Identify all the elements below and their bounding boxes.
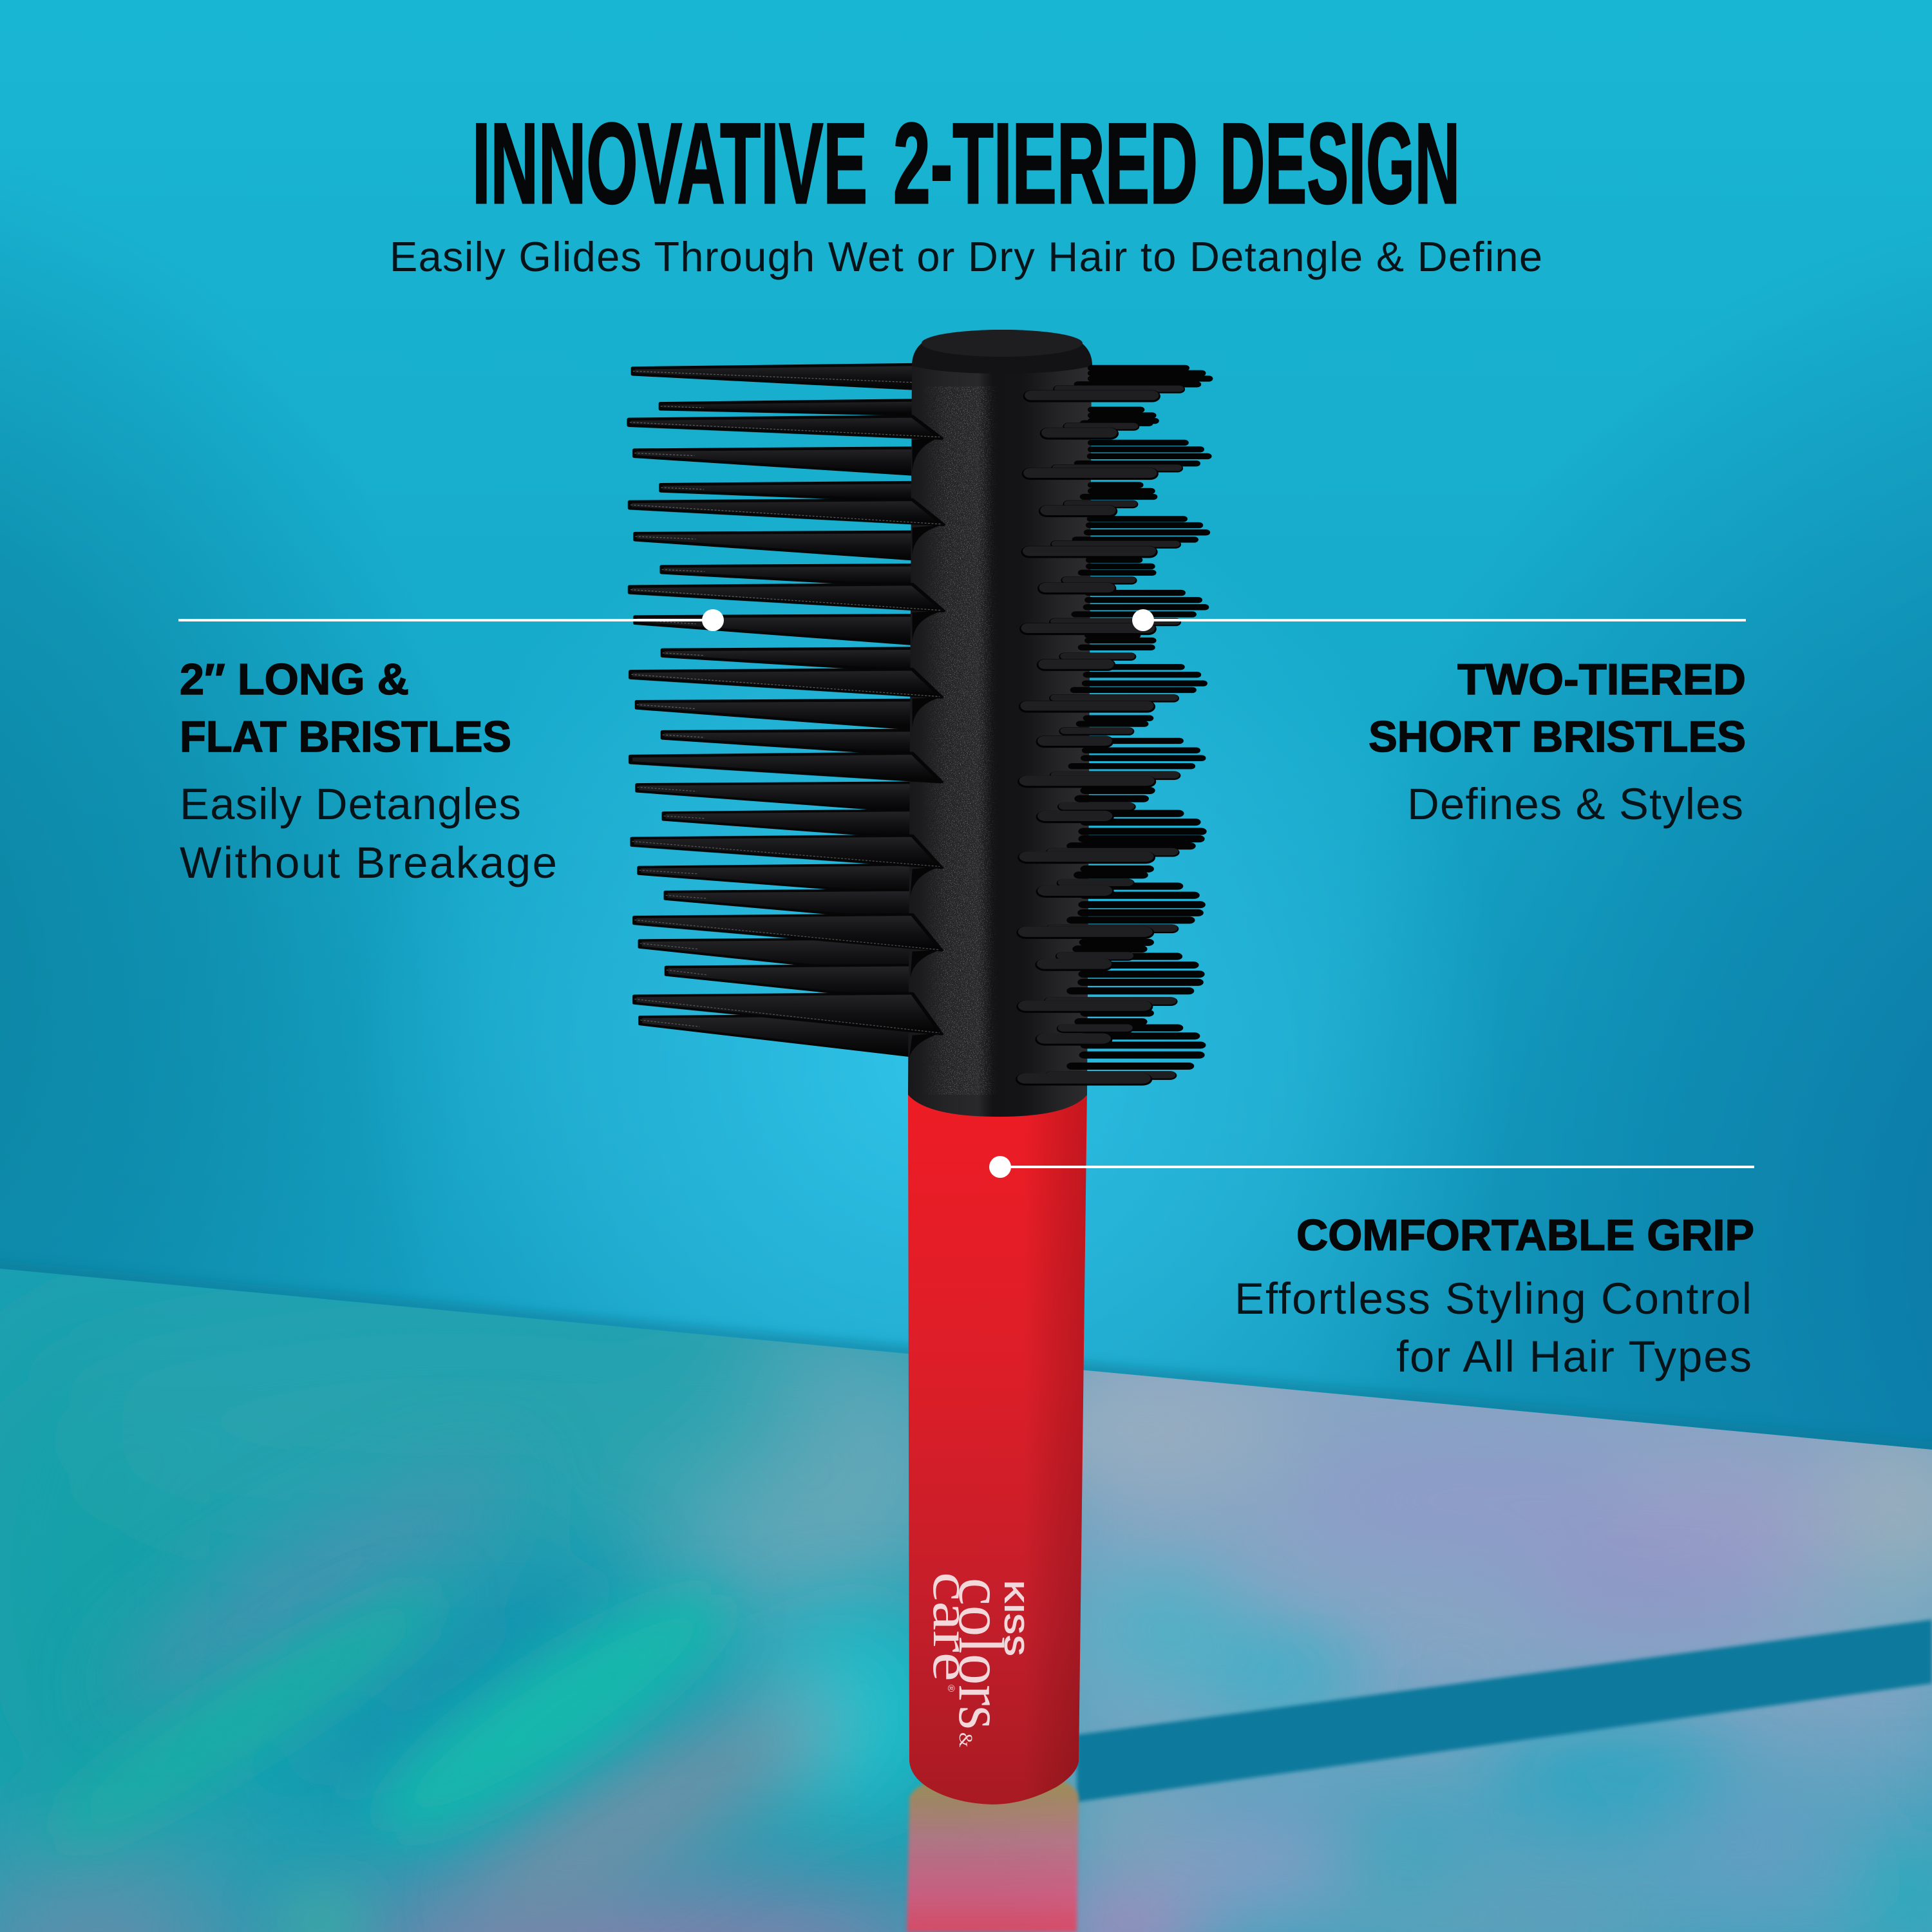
scalloped barrel lobes and front long bristles, lower <box>632 787 942 1057</box>
callout: comfortable grip: Effortless Styling Control <box>1235 1274 1752 1323</box>
speckled highlight on barrel <box>921 386 998 1095</box>
brand logo on handle: care <box>922 1572 981 1681</box>
rear long bristles, upper <box>633 365 914 755</box>
title: 2-TIERED <box>893 99 1198 227</box>
scalloped barrel lobes and front long bristles, upper <box>629 371 943 782</box>
brush reflection on floor <box>907 1781 1079 1932</box>
title: DESIGN <box>1220 99 1460 227</box>
brand logo on handle: KISS <box>998 1580 1030 1656</box>
callout: comfortable grip <box>989 1156 1754 1381</box>
hairbrush <box>629 330 1209 1804</box>
callout: long bristles: Without Breakage <box>180 838 557 887</box>
black brush barrel <box>908 365 1092 1117</box>
callout: long bristles: 2″ LONG & <box>180 655 409 704</box>
leader line and dot: grip <box>989 1156 1754 1178</box>
brand logo on handle: colors <box>945 1578 1017 1730</box>
callout: long bristles <box>178 609 724 887</box>
callout: two-tiered short bristles: Defines & Styles <box>1407 779 1743 829</box>
rear long bristles, lower <box>637 782 914 1056</box>
callout: two-tiered short bristles <box>1132 609 1746 829</box>
background wall <box>0 0 1932 1481</box>
brand logo on handle: ® <box>945 1685 956 1692</box>
callout: two-tiered short bristles: TWO-TIERED <box>1457 655 1746 704</box>
two-tiered short bristles, upper <box>1027 368 1209 766</box>
cast shadow of brush <box>1077 1620 1932 1802</box>
leader line and dot: short bristles <box>1132 609 1746 631</box>
title: INNOVATIVE <box>472 99 867 227</box>
red handle <box>908 1088 1087 1804</box>
title <box>472 99 1460 227</box>
barrel end cap <box>912 330 1092 374</box>
subtitle: Easily Glides Through Wet or Dry Hair to Detangle & Define <box>390 233 1542 280</box>
callout: comfortable grip: COMFORTABLE GRIP <box>1296 1211 1754 1260</box>
two-tiered short bristles, lower <box>1025 775 1201 1079</box>
callout: long bristles: Easily Detangles <box>180 779 521 829</box>
callout: two-tiered short bristles: SHORT BRISTLES <box>1368 712 1746 761</box>
leader line and dot: long bristles <box>178 609 724 631</box>
iridescent reflective floor <box>0 1224 1932 1932</box>
callout: comfortable grip: for All Hair Types <box>1396 1332 1752 1381</box>
brand logo on handle: & <box>955 1732 976 1747</box>
brand logo on handle <box>922 1572 1030 1747</box>
callout: long bristles: FLAT BRISTLES <box>180 712 511 761</box>
